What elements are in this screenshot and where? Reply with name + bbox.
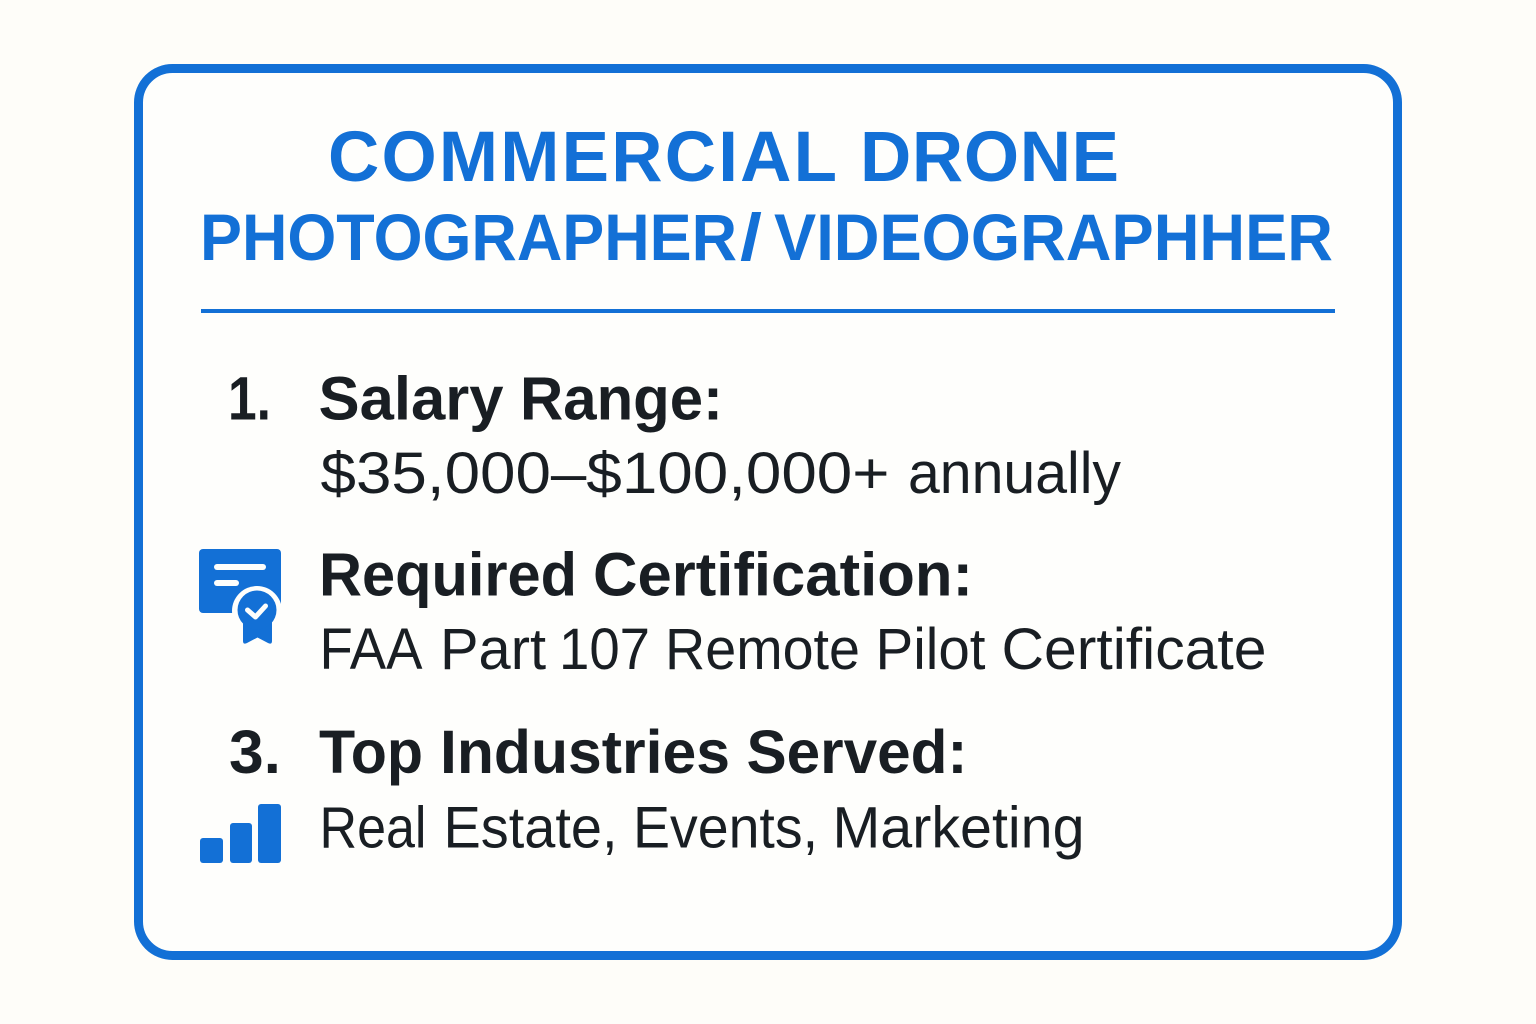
item 2: required certification [319,540,1266,682]
item 2: required certification: Required [319,540,577,608]
item 3: top industries served: Real [320,796,426,860]
item 3: top industries served: Served: [746,718,968,786]
item 3: top industries served: Events, [633,796,818,860]
title: VIDEOGRAPHHER [774,200,1333,274]
item 1: salary range: 1. [228,364,271,432]
title: DRONE [860,118,1119,197]
item 2: required certification: 107 [559,617,650,682]
item 1: salary range [228,364,1121,506]
title: / [740,200,762,274]
title: PHOTOGRAPHER [200,200,737,274]
item 2: required certification: FAA [320,617,423,682]
item 1: salary range: Range: [520,364,723,432]
item 2: required certification: Remote [665,617,860,682]
item 1: salary range: Salary [318,364,504,432]
panel: card [138,68,1398,956]
item 3: top industries served: Marketing [832,796,1084,860]
item 2: required certification: Certificate [1002,617,1266,682]
item 2: required certification: Part [440,617,546,682]
item 3: top industries served: Top [319,718,423,786]
item 2: required certification: Certification: [593,540,973,608]
icon: bar chart [200,804,281,863]
item 3: top industries served: Estate, [444,796,618,860]
item 3: top industries served [229,718,1084,860]
title: COMMERCIAL [328,118,837,197]
item 2: required certification: Pilot [876,617,986,682]
item 1: salary range: $35,000–$100,000+ [320,441,890,506]
item 3: top industries served: 3. [229,718,281,786]
item 3: top industries served: Industries [440,718,730,786]
icon: certificate [199,549,282,644]
item 1: salary range: annually [908,441,1121,506]
title [200,118,1333,274]
